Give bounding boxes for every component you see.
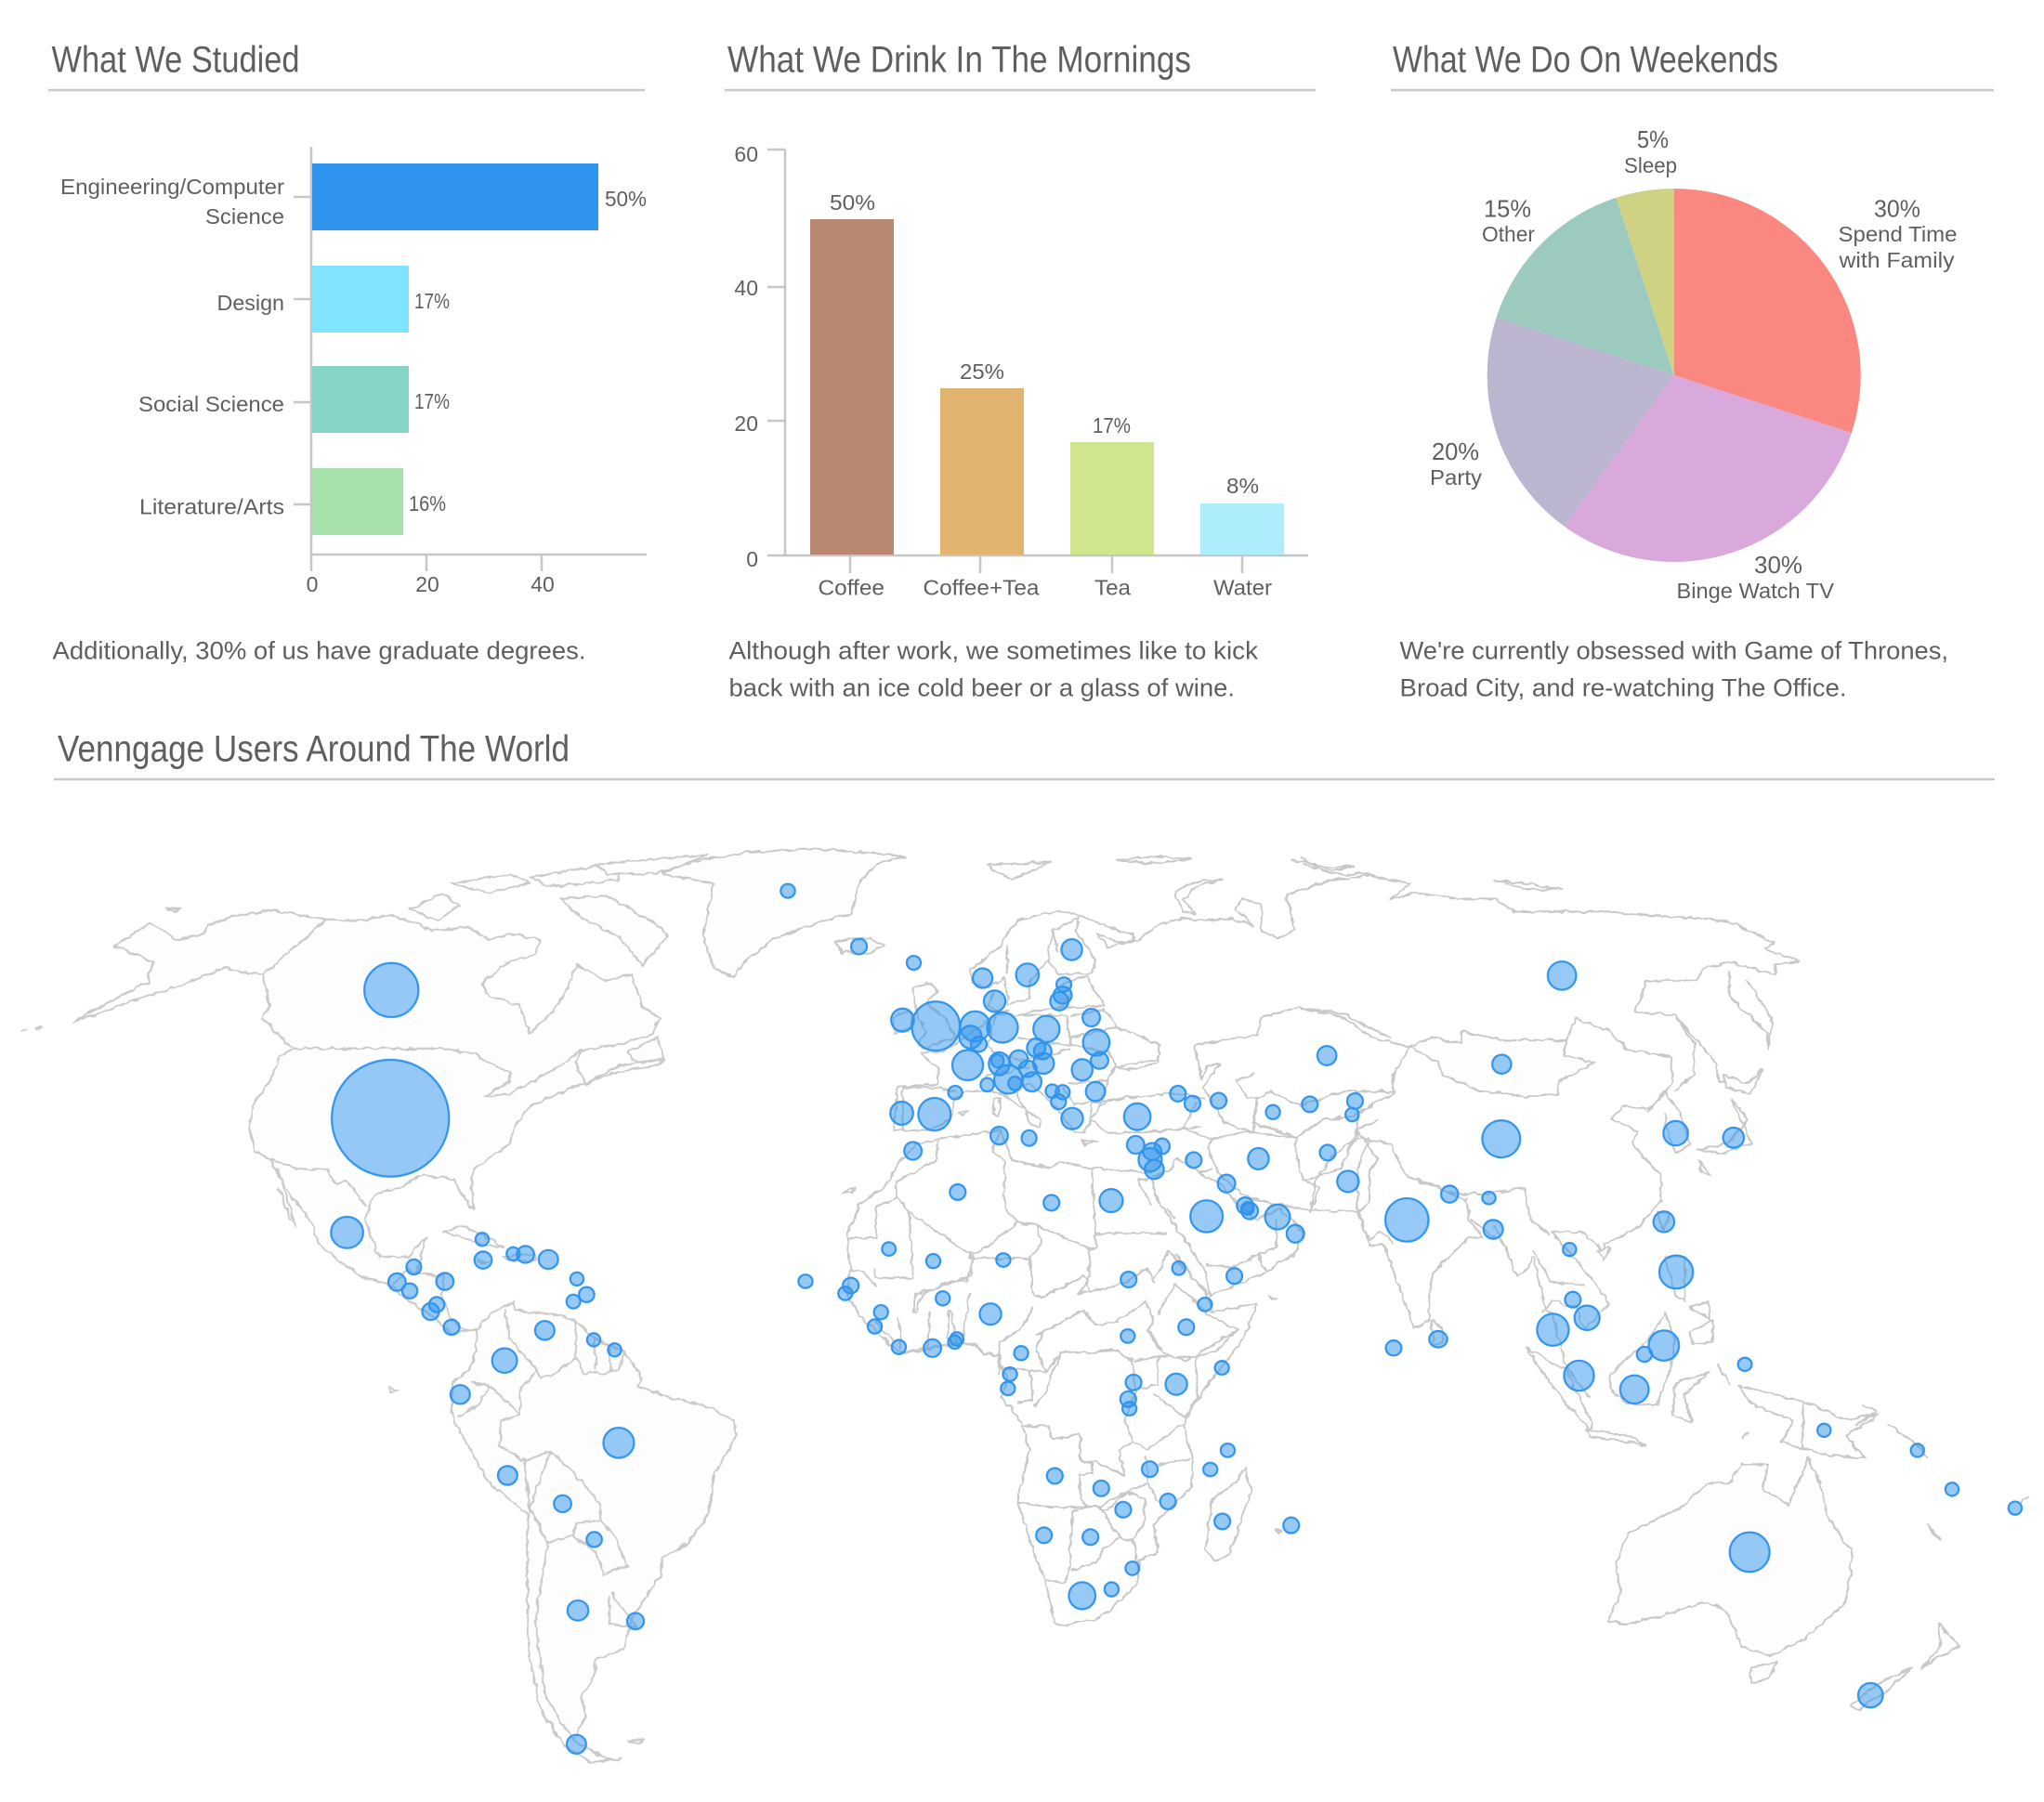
- column chart: morning drinks: 0: [746, 547, 758, 571]
- horizontal bar chart: fields of study: Social Science: [138, 392, 284, 416]
- bubbles: europe, middle east and northern africa: [798, 939, 1363, 1360]
- bar: literature/arts: [312, 468, 403, 535]
- pie chart: weekend activities: [1430, 125, 1957, 603]
- horizontal bar chart: fields of study: 16%: [409, 491, 446, 516]
- horizontal bar chart: fields of study: Engineering/Computer: [60, 175, 284, 199]
- text block: after work drinks: [728, 637, 1259, 702]
- slice: sleep: [1617, 189, 1674, 375]
- panel: what we drink in the mornings: [725, 39, 1316, 702]
- pie chart: weekend activities: Binge Watch TV: [1676, 579, 1835, 603]
- horizontal bar chart: fields of study: 40: [531, 572, 555, 596]
- horizontal bar chart: fields of study: Science: [205, 204, 284, 229]
- pie chart: weekend activities: 30%: [1754, 551, 1802, 579]
- bar: design: [312, 266, 409, 333]
- column chart: morning drinks: Tea: [1094, 576, 1131, 600]
- bar: coffee+tea: [940, 388, 1024, 555]
- heading: what we studied: What We Studied: [52, 39, 299, 80]
- slice: other: [1496, 198, 1674, 375]
- text block: current shows: [1399, 637, 1948, 702]
- slice: binge watch tv: [1565, 375, 1852, 562]
- column chart: morning drinks: [734, 142, 1308, 600]
- text block: current shows: We're currently obsessed with Game of Thrones,: [1399, 637, 1948, 665]
- bar: engineering/computer science: [312, 163, 598, 230]
- bubbles: americas: [331, 884, 795, 1754]
- column chart: morning drinks: 50%: [830, 190, 875, 215]
- pie chart: weekend activities: Party: [1430, 465, 1483, 490]
- slice: party: [1487, 318, 1674, 527]
- column chart: morning drinks: 60: [734, 142, 758, 166]
- column chart: morning drinks: 40: [734, 276, 758, 300]
- bar: tea: [1070, 442, 1154, 555]
- column chart: morning drinks: 20: [734, 411, 758, 436]
- text block: current shows: Broad City, and re-watching The Office.: [1399, 674, 1847, 702]
- bar: social science: [312, 366, 409, 433]
- horizontal bar chart: fields of study: 20: [415, 572, 439, 596]
- horizontal bar chart: fields of study: 0: [307, 572, 318, 596]
- panel: venngage users around the world: [20, 728, 2028, 1762]
- pie chart: weekend activities: Sleep: [1624, 153, 1677, 177]
- horizontal bar chart: fields of study: 17%: [414, 289, 450, 313]
- land: europe, north africa and western asia: [834, 856, 1394, 1375]
- text block: after work drinks: back with an ice cold beer or a glass of wine.: [728, 674, 1235, 702]
- pie chart: weekend activities: 20%: [1432, 437, 1479, 465]
- heading: weekends: What We Do On Weekends: [1393, 39, 1778, 80]
- pie chart: weekend activities: 15%: [1484, 195, 1531, 223]
- panel: what we do on weekends: [1391, 39, 1994, 702]
- pie chart: weekend activities: Other: [1482, 222, 1535, 246]
- column chart: morning drinks: Water: [1213, 576, 1272, 600]
- land: central and southern africa: [851, 1254, 1280, 1626]
- horizontal bar chart: fields of study: 17%: [414, 389, 450, 413]
- horizontal bar chart: fields of study: 50%: [605, 187, 647, 211]
- bar: water: [1200, 503, 1284, 555]
- column chart: morning drinks: Coffee: [818, 576, 884, 600]
- land: north and south america: [20, 855, 737, 1762]
- heading: world map: Venngage Users Around The World: [58, 728, 570, 769]
- pie chart: weekend activities: 5%: [1637, 125, 1669, 153]
- data bubbles: [331, 884, 2022, 1754]
- column chart: morning drinks: 8%: [1226, 474, 1259, 498]
- heading: morning drinks: What We Drink In The Mornings: [727, 39, 1191, 80]
- text block: graduate degrees: Additionally, 30% of us have graduate degrees.: [52, 637, 585, 665]
- horizontal bar chart: fields of study: Literature/Arts: [139, 494, 284, 518]
- land: asia and oceania: [1301, 858, 2028, 1709]
- pie chart: weekend activities: 30%: [1874, 195, 1920, 223]
- column chart: morning drinks: Coffee+Tea: [924, 576, 1040, 600]
- world map outlines: [20, 849, 2028, 1762]
- column chart: morning drinks: 17%: [1093, 413, 1131, 437]
- bubbles: asia and oceania: [1385, 961, 2022, 1707]
- column chart: morning drinks: 25%: [960, 359, 1004, 384]
- bubbles: central and southern africa: [1001, 1361, 1299, 1609]
- pie chart: weekend activities: with Family: [1838, 248, 1955, 272]
- bar: coffee: [810, 219, 894, 555]
- panel: what we studied: [48, 39, 647, 665]
- text block: after work drinks: Although after work, we sometimes like to kick: [728, 637, 1259, 665]
- land: greenland: [662, 849, 905, 977]
- horizontal bar chart: fields of study: Design: [217, 291, 284, 315]
- horizontal bar chart: fields of study: [60, 147, 647, 596]
- pie chart: weekend activities: Spend Time: [1838, 222, 1957, 246]
- slice: spend time with family: [1674, 189, 1861, 433]
